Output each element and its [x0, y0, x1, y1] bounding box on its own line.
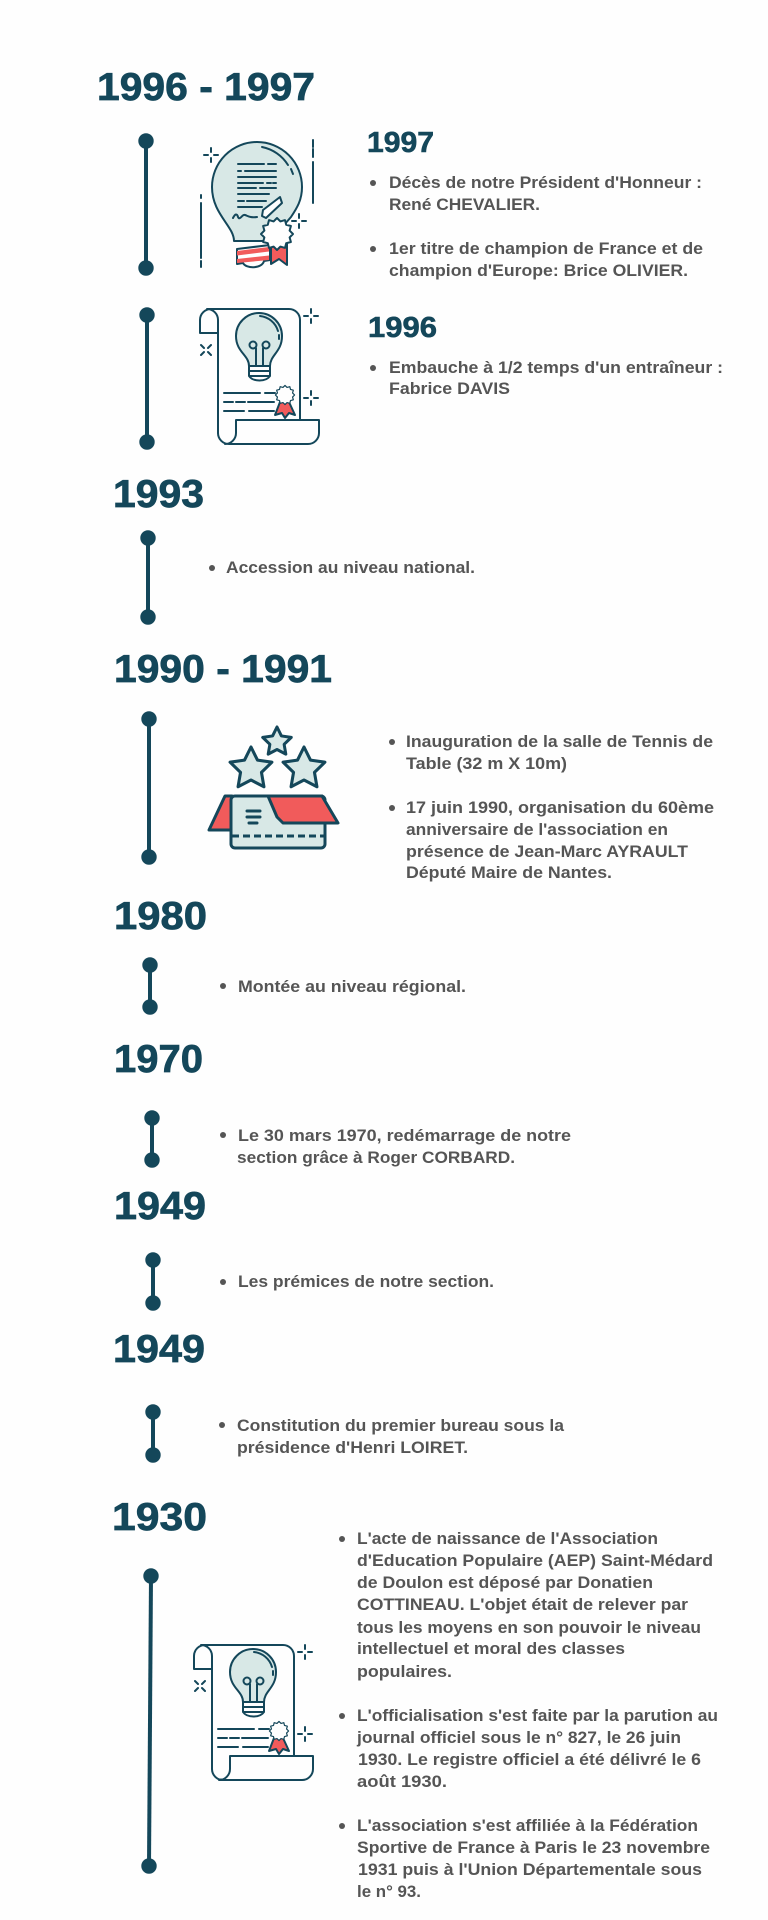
list: 1990 - 1991 events: présence de Jean-Marc AYRAULT [406, 842, 689, 861]
heading: 1930: 1930 [112, 1496, 207, 1539]
heading: 1949: 1949 [114, 1185, 206, 1228]
timeline: 1930 [141, 1568, 159, 1874]
timeline: 1997 [138, 133, 154, 276]
list: 1990 - 1991 events: Député Maire de Nantes. [406, 863, 612, 882]
icon: diploma scroll with bulb [200, 309, 319, 444]
list: 1980 events: Montée au niveau régional. [238, 977, 466, 996]
list: 1930 events: 1930. Le registre officiel a été délivré le 6 [358, 1750, 701, 1769]
list: 1930 events: intellectuel et moral des classes [357, 1639, 625, 1658]
list: 1997 events: champion d'Europe: Brice OLIVIER. [389, 261, 688, 280]
list: 1993 events: Accession au niveau national. [226, 558, 475, 577]
icon: diploma scroll with bulb 1930 [194, 1645, 313, 1780]
timeline: 1980 [142, 957, 158, 1015]
list: 1930 events: août 1930. [357, 1772, 447, 1791]
timeline: 1996 [139, 307, 155, 450]
timeline: 1949 first [145, 1252, 161, 1311]
list: 1996 events [370, 358, 723, 398]
list: 1970 events: section grâce à Roger CORBARD. [237, 1148, 515, 1167]
list: 1997 events: René CHEVALIER. [389, 195, 540, 214]
heading: 1980: 1980 [114, 895, 207, 938]
list: 1990 - 1991 events: anniversaire de l'association en [406, 820, 668, 839]
list: 1997 events [370, 173, 703, 280]
list: 1970 events: Le 30 mars 1970, redémarrage de notre [238, 1126, 571, 1145]
list: 1930 events: Sportive de France à Paris le 23 novembre [357, 1838, 710, 1857]
list: 1996 events: Fabrice DAVIS [389, 379, 510, 398]
list: 1930 events: L'association s'est affiliée à la Fédération [357, 1816, 698, 1835]
list: 1990 - 1991 events: Inauguration de la salle de Tennis de [406, 732, 713, 751]
timeline: 1990 - 1991 [141, 711, 157, 865]
list: 1930 events: COTTINEAU. L'objet était de relever par [357, 1595, 688, 1614]
heading: 1970: 1970 [114, 1038, 203, 1081]
list: 1949 second event: présidence d'Henri LOIRET. [237, 1438, 468, 1457]
year heading: 1997: 1997 [367, 127, 434, 159]
list: 1997 events: 1er titre de champion de France et de [389, 239, 703, 258]
list: 1930 events: d'Education Populaire (AEP) Saint-Médard [357, 1551, 713, 1570]
list: 1930 events [339, 1529, 718, 1901]
year heading: 1996: 1996 [368, 312, 437, 344]
timeline: 1949 second [145, 1404, 161, 1463]
list: 1997 events: Décès de notre Président d'Honneur : [389, 173, 702, 192]
list: 1990 - 1991 events: Table (32 m X 10m) [406, 754, 567, 773]
timeline: 1970 [144, 1110, 160, 1168]
heading: 1990 - 1991: 1990 - 1991 [114, 648, 332, 691]
list: 1990 - 1991 events: 17 juin 1990, organisation du 60ème [406, 798, 714, 817]
list: 1990 - 1991 events [389, 732, 714, 882]
list: 1930 events: L'officialisation s'est faite par la parution au [357, 1706, 718, 1725]
timeline: 1993 [140, 530, 156, 625]
list: 1930 events: populaires. [357, 1662, 452, 1681]
heading: 1949 second: 1949 [113, 1328, 205, 1371]
icon: light bulb with document and badge [201, 140, 313, 267]
heading: 1996 - 1997: 1996 - 1997 [97, 66, 315, 109]
list: 1930 events: 1931 puis à l'Union Départementale sous [358, 1860, 702, 1879]
list: 1949 first event: Les prémices de notre section. [238, 1272, 494, 1291]
list: 1996 events: Embauche à 1/2 temps d'un entraîneur : [389, 358, 723, 377]
list: 1930 events: L'acte de naissance de l'Association [357, 1529, 658, 1548]
list: 1949 second event: Constitution du premier bureau sous la [237, 1416, 565, 1435]
list: 1930 events: de Doulon est déposé par Donatien [357, 1573, 653, 1592]
list: 1930 events: tous les moyens en son pouvoir le niveau [357, 1618, 701, 1637]
heading: 1993: 1993 [113, 473, 204, 516]
list: 1930 events: journal officiel sous le n° 827, le 26 juin [356, 1728, 681, 1747]
icon: open box with three stars [209, 727, 338, 848]
list: 1949 second event [219, 1416, 565, 1457]
list: 1930 events: le n° 93. [357, 1882, 421, 1901]
list: 1970 events [220, 1126, 571, 1167]
